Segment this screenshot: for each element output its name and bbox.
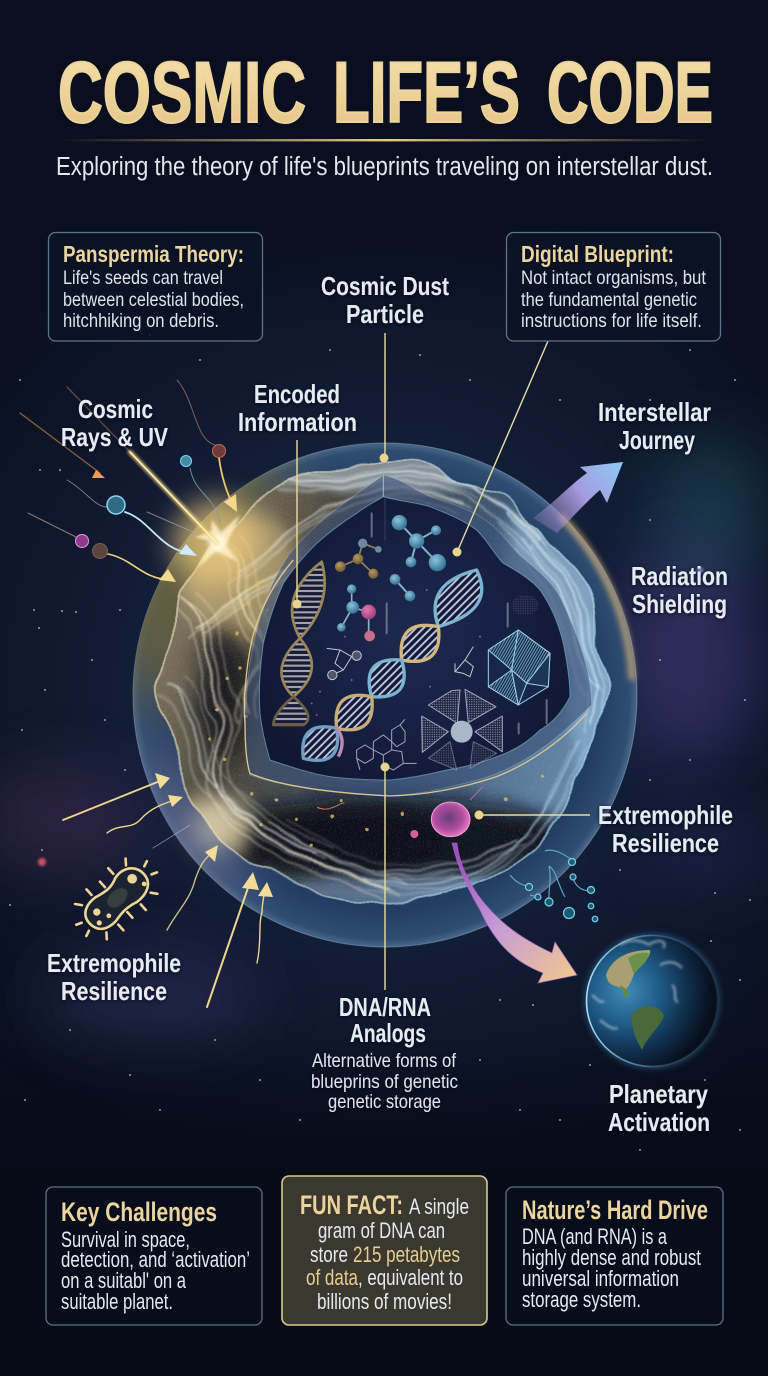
panel: key challenges: on a suitabl' on a [61, 1268, 187, 1293]
leader lines and dots [292, 333, 590, 990]
label: extremophile resilience left: Resilience [61, 976, 167, 1006]
panel: panspermia theory [48, 232, 262, 341]
panel: fun fact callout: 215 petabytes [353, 1242, 460, 1267]
panel: digital blueprint: Digital Blueprint: [521, 241, 674, 267]
panel: nature's hard drive: universal information [522, 1266, 679, 1291]
panel: panspermia theory: Life's seeds can travel [63, 267, 223, 289]
title [58, 45, 713, 141]
label: DNA/RNA analogs: genetic storage [328, 1091, 441, 1113]
label: radiation shielding [631, 561, 728, 619]
gold rim on halo right side [560, 515, 632, 680]
panel: digital blueprint: instructions for life itself. [521, 310, 702, 332]
icon: left DNA helix [273, 562, 325, 725]
label: planetary activation: Planetary [609, 1079, 708, 1109]
panel: key challenges: Survival in space, [61, 1227, 190, 1252]
label: encoded information: Encoded [254, 379, 340, 409]
label: DNA/RNA analogs: DNA/RNA [339, 992, 431, 1022]
glass band around inner chamber [245, 475, 592, 796]
title: COSMIC [58, 45, 306, 141]
panel: fun fact callout: A single [409, 1194, 469, 1219]
arrows: cosmic rays bottom-left [63, 773, 273, 1007]
label: cosmic rays and UV: Rays & UV [61, 422, 169, 452]
title: LIFE’S [333, 45, 520, 141]
panel: nature's hard drive: DNA (and RNA) is a [522, 1224, 668, 1249]
icon: main diagonal DNA helix [303, 570, 482, 760]
label: DNA/RNA analogs: blueprins of genetic [311, 1071, 458, 1093]
icon: blue molecules near planet [510, 850, 598, 922]
label: interstellar journey [598, 397, 711, 455]
gold membrane line [244, 560, 587, 796]
starburst glow [173, 499, 261, 850]
label: interstellar journey: Journey [619, 425, 695, 455]
icon: molecules [312, 513, 547, 733]
icon: cosmic ray heads and particles [76, 444, 237, 582]
inner chamber [259, 497, 570, 780]
panel: fun fact callout: of data [306, 1265, 359, 1290]
panel: fun fact callout: store [310, 1242, 348, 1267]
panel: panspermia theory: between celestial bodies, [63, 289, 244, 311]
panel: panspermia theory: Panspermia Theory: [63, 241, 244, 267]
panel: nature's hard drive: Nature’s Hard Drive [522, 1195, 708, 1225]
label: extremophile resilience left: Extremophile [47, 948, 181, 978]
label: planetary activation [608, 1079, 710, 1137]
arrow: planetary activation [452, 843, 577, 983]
panel: key challenges: Key Challenges [61, 1197, 217, 1227]
arrow: interstellar journey [533, 462, 623, 533]
label: extremophile resilience right [598, 800, 733, 858]
label: cosmic rays and UV: Cosmic [78, 394, 153, 424]
panel: nature's hard drive [506, 1187, 723, 1325]
dust particle body [154, 458, 612, 905]
label: cosmic dust particle: Particle [346, 299, 424, 329]
panel: fun fact callout: FUN FACT: [300, 1190, 403, 1220]
panel: fun fact callout: gram of DNA can [318, 1218, 445, 1243]
panel: digital blueprint [506, 232, 720, 341]
panel: nature's hard drive: highly dense and robust [522, 1245, 701, 1270]
panel: key challenges [46, 1187, 262, 1325]
icon: dotted triangle structure [422, 689, 502, 770]
label: cosmic dust particle: Cosmic Dust [321, 271, 449, 301]
panel: digital blueprint: the fundamental genetic [521, 289, 697, 311]
panel: panspermia theory: hitchhiking on debris. [63, 310, 219, 332]
arrows: cosmic rays top-left [20, 380, 233, 580]
label: DNA/RNA analogs [311, 992, 458, 1113]
label: planetary activation: Activation [608, 1107, 710, 1137]
panel: fun fact callout: , equivalent to [358, 1265, 463, 1290]
panel: fun fact callout: billions of movies! [317, 1289, 452, 1314]
icon: planet earth [584, 933, 720, 1069]
label: extremophile resilience left [47, 948, 181, 1006]
label: extremophile resilience right: Extremophile [598, 800, 733, 830]
label: interstellar journey: Interstellar [598, 397, 711, 427]
panel: nature's hard drive: storage system. [522, 1287, 641, 1312]
icon: extremophile microbe [63, 846, 171, 951]
icon: pink cell [410, 787, 483, 838]
label: DNA/RNA analogs: Analogs [350, 1018, 426, 1048]
speckles [210, 587, 543, 845]
panel: fun fact callout [282, 1176, 487, 1325]
label: radiation shielding: Shielding [632, 589, 727, 619]
panel: key challenges: suitable planet. [61, 1289, 173, 1314]
icon: hexagon network [357, 719, 417, 770]
panel: key challenges: detection, and ‘activation’ [61, 1247, 250, 1272]
icon: crystal polyhedron [488, 630, 550, 705]
label: encoded information: Information [238, 407, 357, 437]
panel: digital blueprint: Not intact organisms, but [521, 267, 706, 289]
label: DNA/RNA analogs: Alternative forms of [312, 1050, 456, 1072]
label: encoded information [238, 379, 357, 437]
label: cosmic dust particle [321, 271, 449, 329]
halo sphere and dust particle [132, 442, 639, 948]
label: cosmic rays and UV [61, 394, 169, 452]
label: extremophile resilience right: Resilience [612, 828, 719, 858]
wisps [159, 467, 613, 899]
label: radiation shielding: Radiation [631, 561, 728, 591]
